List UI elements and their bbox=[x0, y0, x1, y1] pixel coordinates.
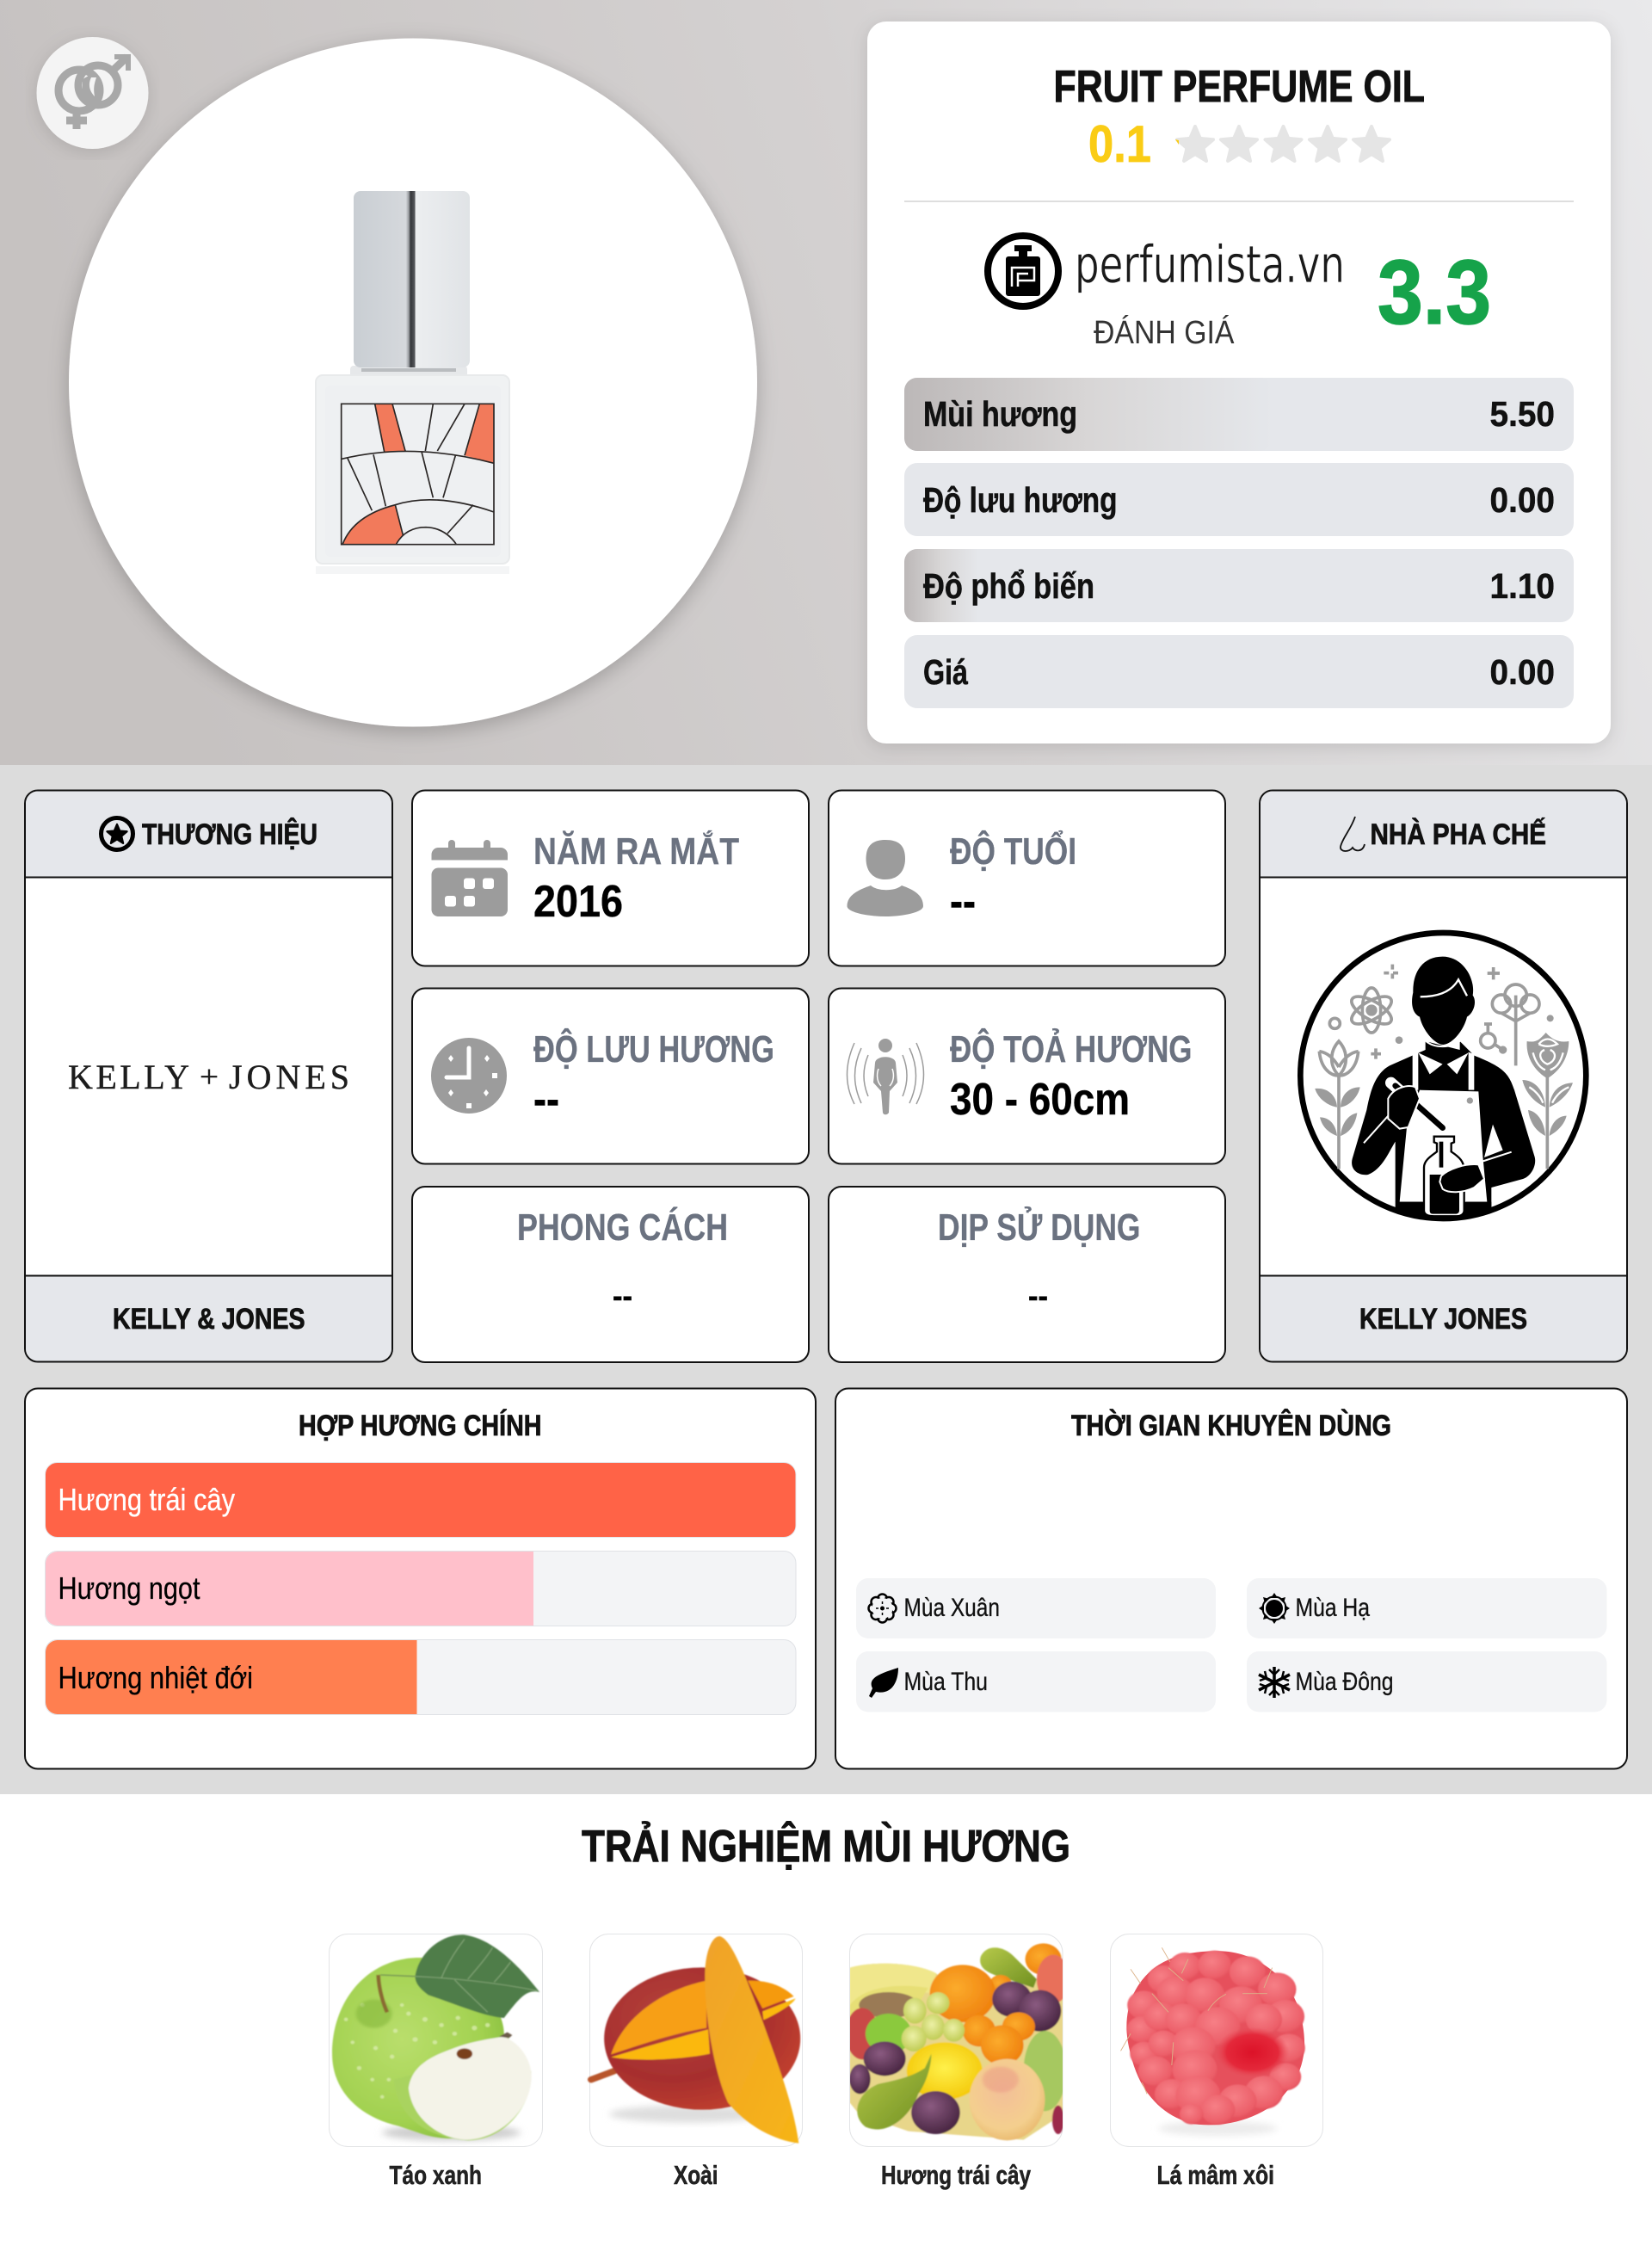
panel: perfumer bbox=[1260, 790, 1627, 1361]
overall score: 3.3 bbox=[1378, 242, 1491, 343]
score bar: popularity bbox=[904, 549, 1574, 622]
perfumer heading: NHÀ PHA CHẾ bbox=[1370, 818, 1546, 851]
icon: scent radius bbox=[847, 1039, 924, 1114]
figure of perfumer bbox=[1352, 957, 1535, 1219]
label: ĐỘ TOẢ HƯƠNG bbox=[950, 1027, 1193, 1070]
community rating value: 0.1 bbox=[1088, 115, 1151, 173]
accord bar: sweet: Hương ngọt bbox=[59, 1570, 200, 1606]
score bar: scent: Mùi hương bbox=[923, 394, 1077, 434]
icon: gender badge bbox=[36, 37, 148, 149]
season: winter bbox=[1247, 1651, 1607, 1712]
score bar: scent: 5.50 bbox=[1490, 394, 1555, 434]
note name: Hương trái cây bbox=[881, 2160, 1032, 2190]
score bar: longevity: Độ lưu hương bbox=[923, 480, 1117, 520]
panel: age bbox=[829, 790, 1225, 966]
title: FRUIT PERFUME OIL bbox=[1053, 62, 1425, 112]
season: autumn bbox=[856, 1651, 1216, 1712]
panel: release year bbox=[412, 790, 809, 966]
label: ĐỘ LƯU HƯƠNG bbox=[533, 1027, 774, 1070]
panel: style bbox=[412, 1187, 809, 1362]
accord bar: tropical: Hương nhiệt đới bbox=[59, 1660, 253, 1695]
seasons heading: THỜI GIAN KHUYÊN DÙNG bbox=[1071, 1410, 1391, 1442]
panel: product photo circle bbox=[69, 38, 757, 726]
icon: calendar bbox=[432, 840, 508, 916]
score bar: scent bbox=[904, 378, 1574, 451]
label: PHONG CÁCH bbox=[517, 1206, 728, 1249]
icon: clock bbox=[431, 1038, 507, 1114]
value: -- bbox=[533, 1075, 559, 1125]
panel: occasion bbox=[829, 1187, 1225, 1362]
brand heading: THƯƠNG HIỆU bbox=[142, 818, 317, 851]
value: 30 - 60cm bbox=[950, 1075, 1130, 1125]
accords heading: HỢP HƯƠNG CHÍNH bbox=[299, 1410, 542, 1442]
scent experience section background bbox=[0, 1794, 1652, 2252]
brand logo wordmark: KELLY bbox=[68, 1058, 189, 1096]
score bar: popularity: 1.10 bbox=[1490, 566, 1555, 606]
season: autumn: Mùa Thu bbox=[903, 1668, 988, 1696]
icon: person bbox=[847, 840, 923, 916]
top section background bbox=[0, 0, 1652, 765]
panel: product card bbox=[867, 22, 1611, 743]
season: spring bbox=[856, 1578, 1216, 1638]
season: winter: Mùa Đông bbox=[1296, 1668, 1394, 1696]
note card: green apple bbox=[329, 1934, 542, 2190]
icon: green apple bbox=[332, 1934, 539, 2141]
note card: mixed fruit bbox=[846, 1934, 1069, 2190]
brand logo wordmark: JONES bbox=[229, 1058, 349, 1096]
icon: leaf bbox=[869, 1668, 898, 1698]
section heading: TRẢI NGHIỆM MÙI HƯƠNG bbox=[582, 1821, 1070, 1872]
accord bar: fruity: Hương trái cây bbox=[59, 1482, 235, 1517]
brand logo wordmark bbox=[68, 1058, 349, 1096]
note name: Táo xanh bbox=[389, 2160, 482, 2190]
perfumista logo bbox=[988, 235, 1345, 306]
brand logo wordmark: + bbox=[200, 1059, 219, 1094]
panel: recommended time bbox=[835, 1389, 1627, 1769]
rating label: ĐÁNH GIÁ bbox=[1094, 314, 1235, 351]
details section background bbox=[0, 765, 1652, 1794]
season: summer: Mùa Hạ bbox=[1296, 1594, 1370, 1622]
panel: main accords bbox=[25, 1389, 816, 1769]
value: -- bbox=[613, 1278, 632, 1313]
panel: projection bbox=[829, 988, 1225, 1163]
icon: mixed fruit bbox=[846, 1943, 1069, 2140]
icon: flower bbox=[869, 1594, 897, 1623]
icon: snowflake bbox=[1259, 1667, 1290, 1698]
season: summer bbox=[1247, 1578, 1607, 1638]
icon: sun bbox=[1259, 1593, 1290, 1624]
note card: raspberry bbox=[1110, 1934, 1323, 2190]
accord bar: tropical bbox=[45, 1640, 796, 1714]
score bar: price: Giá bbox=[923, 652, 968, 692]
label: NĂM RA MẮT bbox=[533, 830, 739, 873]
brand name: KELLY & JONES bbox=[113, 1303, 305, 1336]
rating stars bbox=[1175, 126, 1390, 161]
icon: brand star bbox=[102, 818, 133, 850]
season: spring: Mùa Xuân bbox=[903, 1594, 1000, 1622]
note card: mango bbox=[590, 1934, 802, 2190]
label: DỊP SỬ DỤNG bbox=[938, 1205, 1141, 1249]
value: -- bbox=[1028, 1278, 1048, 1313]
accord bar: sweet bbox=[45, 1551, 796, 1626]
score bar: longevity bbox=[904, 463, 1574, 536]
value: 2016 bbox=[533, 877, 623, 927]
icon: raspberry bbox=[1121, 1947, 1305, 2136]
score bar: price: 0.00 bbox=[1490, 652, 1555, 692]
perfumer illustration bbox=[1300, 933, 1586, 1219]
icon: perfume bottle bbox=[316, 191, 509, 574]
perfumista logo: perfumista.vn bbox=[1075, 235, 1345, 295]
note name: Xoài bbox=[674, 2160, 718, 2190]
score bar: popularity: Độ phổ biến bbox=[923, 566, 1094, 606]
accord bar: fruity bbox=[45, 1463, 796, 1537]
panel: longevity bbox=[412, 988, 809, 1163]
value: -- bbox=[950, 877, 976, 927]
panel: brand bbox=[25, 790, 392, 1361]
icon: mango bbox=[591, 1936, 800, 2144]
score bar: price bbox=[904, 635, 1574, 708]
icon: nose bbox=[1341, 817, 1365, 851]
botanical decorations bbox=[1315, 965, 1573, 1169]
note name: Lá mâm xôi bbox=[1156, 2160, 1274, 2190]
label: ĐỘ TUỔI bbox=[950, 829, 1076, 873]
score bar: longevity: 0.00 bbox=[1490, 480, 1555, 520]
perfumer name: KELLY JONES bbox=[1359, 1303, 1527, 1336]
